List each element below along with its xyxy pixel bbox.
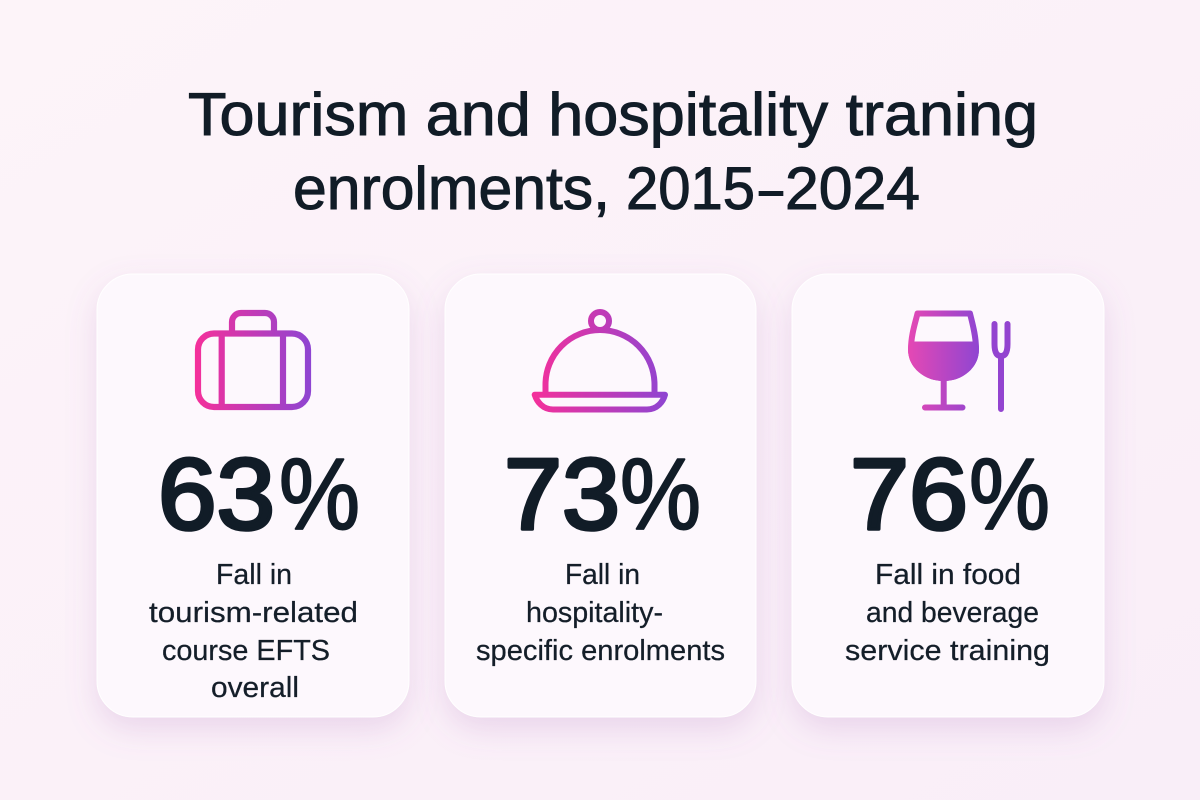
title: enrolments, bbox=[293, 155, 610, 222]
label: food and beverage: service training bbox=[845, 635, 1050, 667]
title: Tourism and hospitality traning bbox=[188, 81, 1038, 148]
label: tourism: Fall in bbox=[216, 559, 292, 591]
panel: food and beverage bbox=[792, 274, 1104, 717]
icon: wine glass bbox=[911, 314, 976, 408]
label: tourism bbox=[149, 559, 358, 704]
icon: suitcase bbox=[198, 313, 308, 407]
label: tourism: tourism-related bbox=[149, 597, 358, 629]
stat: 63%: % bbox=[279, 439, 360, 551]
stat: 73%: 73 bbox=[504, 439, 620, 551]
label: food and beverage: Fall in food bbox=[875, 559, 1021, 591]
icon: fork bbox=[994, 324, 1008, 409]
panel: tourism bbox=[97, 274, 409, 717]
title bbox=[188, 81, 1038, 222]
title: – bbox=[759, 155, 783, 222]
stat: 76%: 76 bbox=[850, 439, 968, 551]
label: hospitality: specific enrolments bbox=[476, 635, 725, 667]
stat: 73%: % bbox=[620, 439, 701, 551]
stat: 76% bbox=[850, 439, 1050, 551]
title: 2015 bbox=[626, 155, 755, 222]
label: hospitality: hospitality- bbox=[526, 597, 663, 629]
stat: 76%: % bbox=[969, 439, 1050, 551]
stat: 63%: 63 bbox=[158, 439, 275, 551]
stat: 73% bbox=[504, 439, 701, 551]
label: tourism: course EFTS bbox=[162, 635, 330, 667]
label: food and beverage: and beverage bbox=[866, 597, 1039, 629]
label: hospitality: Fall in bbox=[565, 559, 640, 591]
stat: 63% bbox=[158, 439, 360, 551]
label: tourism: overall bbox=[211, 672, 299, 704]
label: food and beverage bbox=[845, 559, 1050, 667]
label: hospitality bbox=[476, 559, 725, 667]
title: 2024 bbox=[785, 155, 920, 222]
icon: cloche bbox=[535, 312, 665, 410]
panel: hospitality bbox=[445, 274, 756, 717]
